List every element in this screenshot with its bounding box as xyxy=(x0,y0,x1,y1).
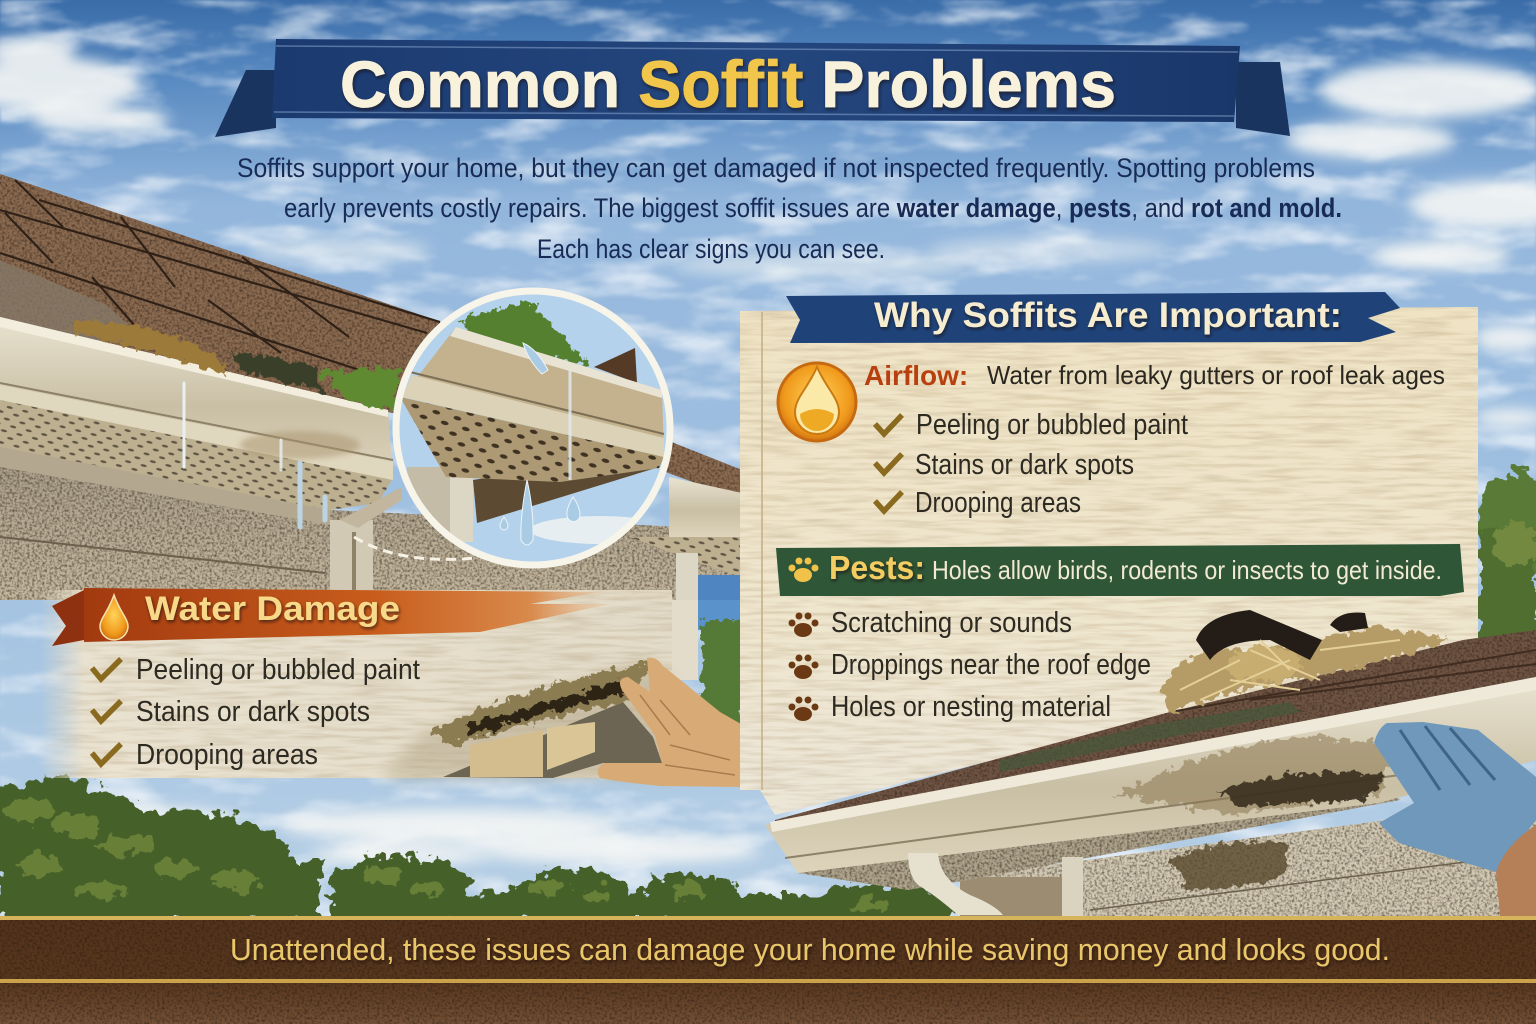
panel: why soffits are important xyxy=(740,292,1478,815)
icon: water drop xyxy=(100,595,128,640)
footer band xyxy=(0,916,1536,1024)
paper background xyxy=(740,307,1478,815)
icon: gloved hand xyxy=(1374,722,1536,916)
gutter front xyxy=(0,317,393,480)
water damage heading ribbon: Water Damage xyxy=(145,590,400,628)
paw item: Scratching or sounds xyxy=(831,607,1072,639)
pests band: Holes allow birds, rodents or insects to get inside. xyxy=(932,555,1442,585)
nest xyxy=(1160,610,1450,712)
pests band: Pests: xyxy=(829,549,925,586)
airflow checklist xyxy=(875,409,1188,519)
paw item: Holes or nesting material xyxy=(831,691,1111,723)
wall xyxy=(0,447,742,600)
left panel: water damage xyxy=(40,588,742,787)
title: Common Soffit Problems xyxy=(340,47,1116,121)
left house illustration xyxy=(0,174,742,605)
airflow text: Water from leaky gutters or roof leak ages xyxy=(987,360,1445,390)
roof shingles xyxy=(0,174,742,500)
post and brace xyxy=(330,487,402,600)
damaged soffit detail xyxy=(380,660,672,778)
foliage gap xyxy=(702,620,742,730)
post behind panel xyxy=(672,600,698,680)
intro paragraph: Each has clear signs you can see. xyxy=(537,234,885,264)
dashed callout line xyxy=(354,537,475,559)
magnifier circle xyxy=(396,291,670,565)
icon: hand xyxy=(598,658,741,787)
paper fade xyxy=(40,590,672,778)
wall xyxy=(960,800,1536,916)
water damage checklist xyxy=(92,654,420,771)
heading band: Why Soffits Are Important: xyxy=(874,296,1342,335)
water drips xyxy=(184,383,325,527)
post xyxy=(1062,857,1083,916)
water damage heading ribbon xyxy=(52,588,610,646)
soffit vented xyxy=(0,398,393,510)
blue sky gap xyxy=(698,600,742,630)
stains xyxy=(1116,735,1394,890)
title banner xyxy=(215,39,1290,137)
pests checklist xyxy=(788,607,1151,723)
bottom trees xyxy=(0,780,960,925)
intro paragraph: early prevents costly repairs. The biggest soffit issues are water damage, pests, and rot and mold. xyxy=(284,193,1342,223)
bottom right roof illustration xyxy=(765,610,1536,917)
icon: airflow drop badge xyxy=(778,363,856,441)
fascia band xyxy=(0,447,330,525)
check item: Peeling or bubbled paint xyxy=(916,409,1188,441)
check item: Drooping areas xyxy=(136,739,318,771)
check item xyxy=(875,487,1081,519)
check item: Stains or dark spots xyxy=(915,449,1134,481)
downspout xyxy=(908,853,1003,915)
intro paragraph xyxy=(237,153,1342,264)
paw item: Droppings near the roof edge xyxy=(831,649,1151,681)
gutter xyxy=(765,680,1536,873)
footer text: Unattended, these issues can damage your home while saving money and looks good. xyxy=(230,932,1390,967)
distant trees right xyxy=(1476,470,1536,650)
soffit vents xyxy=(798,778,1400,890)
intro paragraph: Soffits support your home, but they can get damaged if not inspected frequently. Spotting problems xyxy=(237,153,1315,183)
right roof xyxy=(775,630,1536,822)
heading band xyxy=(786,292,1400,343)
check item: Drooping areas xyxy=(915,487,1081,519)
airflow text: Airflow: xyxy=(864,360,968,391)
gutter debris xyxy=(73,321,400,412)
pests band xyxy=(776,544,1464,596)
check item: Peeling or bubbled paint xyxy=(136,654,420,686)
check item: Stains or dark spots xyxy=(136,696,370,728)
right gutter section xyxy=(630,477,742,605)
icon: paw xyxy=(788,558,818,582)
